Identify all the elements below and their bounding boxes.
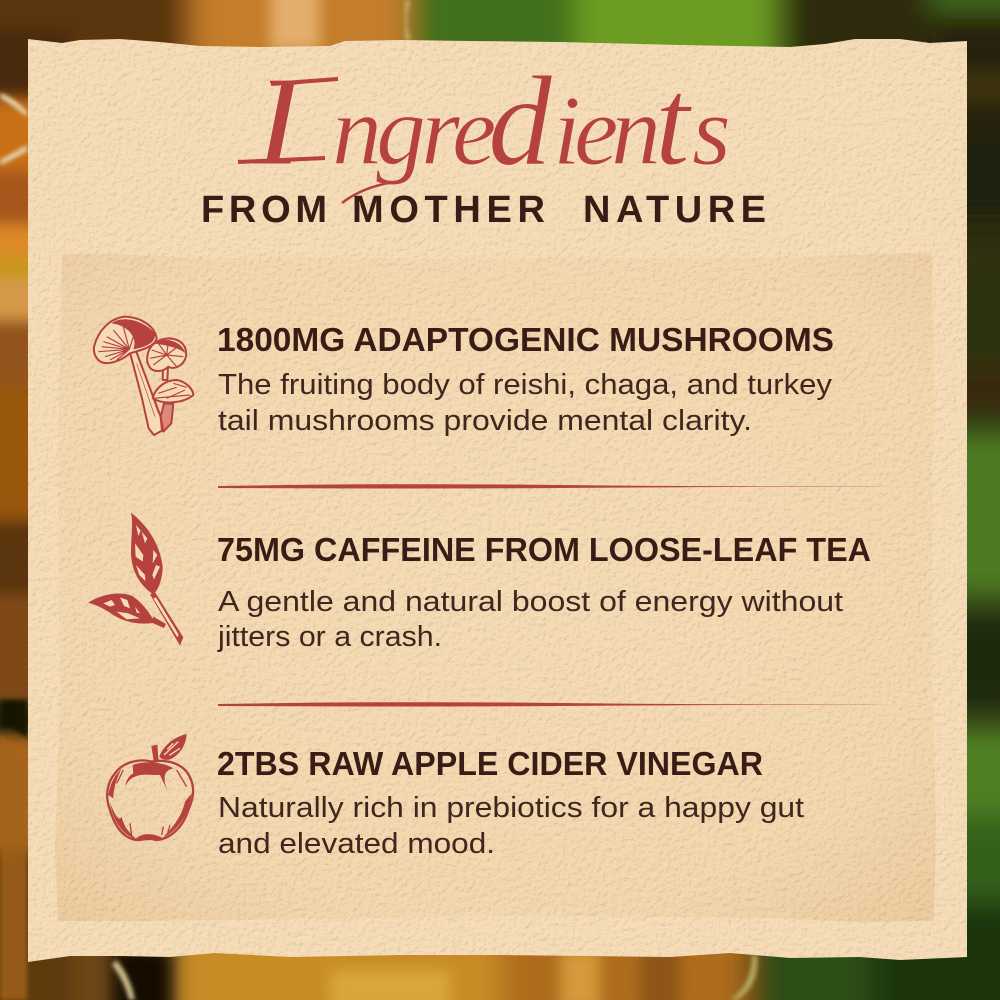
- title: Ingredients: r: [421, 75, 461, 186]
- heading: apple cider vinegar: 2TBS RAW APPLE CIDER VINEGAR: [217, 745, 763, 782]
- text: mushrooms description: tail mushrooms provide mental clarity.: [218, 405, 752, 437]
- title: Ingredients: s: [692, 75, 731, 186]
- title: Ingredients: i: [553, 75, 581, 186]
- title: Ingredients: d: [488, 50, 553, 192]
- text: apple cider vinegar description: and elevated mood.: [218, 828, 495, 860]
- title: Ingredients: n: [611, 75, 661, 186]
- subtitle: from mother nature: [201, 189, 766, 231]
- heading: caffeine: 75MG CAFFEINE FROM LOOSE-LEAF TEA: [217, 531, 871, 568]
- subtitle: from mother nature: FROM: [201, 189, 327, 231]
- text: mushrooms description: The fruiting body of reishi, chaga, and turkey: [218, 369, 833, 401]
- subtitle: from mother nature: MOTHER: [352, 189, 545, 231]
- text: caffeine description: [217, 586, 843, 653]
- text: apple cider vinegar description: Naturally rich in prebiotics for a happy gut: [218, 792, 804, 824]
- icon: mushrooms: [94, 317, 193, 435]
- panel: inner stained parchment: [55, 253, 936, 922]
- title: Ingredients: t: [655, 54, 693, 192]
- title: Ingredients: n: [332, 75, 382, 186]
- divider: [218, 484, 890, 488]
- title: Ingredients: e: [452, 75, 496, 186]
- text: mushrooms description: [218, 369, 833, 437]
- divider: [218, 702, 890, 706]
- title: Ingredients: I: [253, 51, 308, 192]
- ingredient: mushrooms: [94, 317, 834, 437]
- ingredient: apple cider vinegar: [107, 734, 804, 860]
- text: caffeine description: jitters or a crash.: [217, 621, 442, 653]
- text: caffeine description: A gentle and natural boost of energy without: [218, 586, 843, 618]
- icon: apple: [107, 734, 193, 840]
- title: Ingredients: g: [376, 75, 426, 186]
- ingredient: caffeine: [88, 513, 871, 653]
- heading: mushrooms: 1800MG ADAPTOGENIC MUSHROOMS: [217, 321, 834, 358]
- title: Ingredients: e: [574, 75, 618, 186]
- title: Ingredients: [238, 50, 731, 203]
- subtitle: from mother nature: NATURE: [583, 189, 766, 231]
- text: apple cider vinegar description: [218, 792, 804, 860]
- icon: tea leaf: [88, 513, 183, 646]
